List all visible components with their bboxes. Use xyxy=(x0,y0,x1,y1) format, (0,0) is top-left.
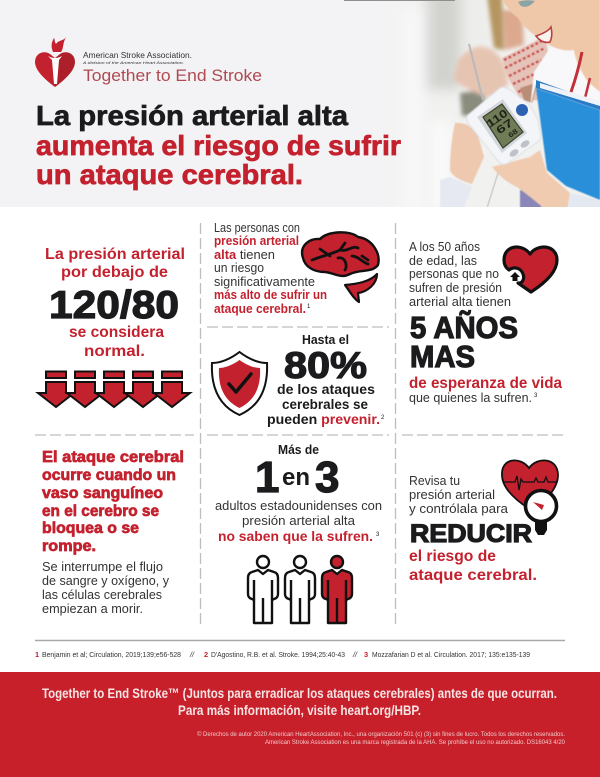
icon: heart and torch xyxy=(35,37,75,87)
footnotes: D'Agostino, R.B. et al. Stroke. 1994;25:40-43 xyxy=(211,650,345,659)
text: normal pressure: La presión arterial xyxy=(45,246,185,263)
title: un ataque cerebral. xyxy=(36,159,303,190)
text: 80 percent: 2 xyxy=(381,415,385,421)
text: risk: ataque cerebral. xyxy=(214,302,306,316)
text: 1 en 3: 3 xyxy=(376,532,380,538)
text: 80 percent: de los ataques xyxy=(277,381,375,397)
face and neck xyxy=(500,0,600,92)
copyright: © Derechos de autor 2020 American HeartAssociation, Inc., una organización 501 (c) (3) sin fines de lucro. Todos los derechos reservados. xyxy=(197,731,565,738)
text: explanation: las células cerebrales xyxy=(42,588,162,602)
text: risk: Las personas con xyxy=(214,221,300,235)
panel: what is a stroke xyxy=(42,449,184,616)
folder xyxy=(536,88,600,200)
footnotes: // xyxy=(352,650,358,659)
text: definition: El ataque cerebral xyxy=(42,449,184,466)
text: definition: rompe. xyxy=(42,538,96,555)
title xyxy=(36,100,401,190)
text: 1 en 3: adultos estadounidenses con xyxy=(215,499,382,513)
panel: 5 years more: que quienes la sufren. xyxy=(409,391,532,405)
copyright xyxy=(197,731,566,746)
icon: down arrows xyxy=(38,372,190,407)
text: explanation: empiezan a morir. xyxy=(42,602,143,616)
footnotes: // xyxy=(189,650,195,659)
panel: 120/80 normal xyxy=(38,246,190,407)
footnotes: 3 xyxy=(364,650,368,659)
hands and sleeve xyxy=(450,123,484,184)
logo text: American Stroke Association. xyxy=(83,50,192,60)
panel: reduce the risk xyxy=(409,460,558,584)
footer band xyxy=(0,672,600,777)
text: 1 en 3: 3 xyxy=(315,453,339,502)
text: intro: sufren de presión xyxy=(409,281,502,295)
text: intro xyxy=(409,240,511,309)
icon: three people xyxy=(248,556,352,623)
text: definition xyxy=(42,449,184,555)
text: intro: de edad, las xyxy=(409,254,477,268)
header background xyxy=(0,0,600,207)
panel: 80% preventable xyxy=(212,332,385,427)
panel: brain risk xyxy=(214,221,379,316)
text: normal pressure xyxy=(45,246,185,360)
number: 5 años mas: 5 AÑOS xyxy=(410,310,518,345)
header photo: woman with blood pressure monitor xyxy=(344,0,600,215)
text: risk: más alto de sufrir un xyxy=(214,288,327,302)
text: life expectancy: de esperanza de vida xyxy=(409,375,562,392)
logo: American Stroke Association: Together to End Stroke xyxy=(83,66,262,85)
text: intro: arterial alta tienen xyxy=(409,295,511,309)
text: 80 percent xyxy=(267,332,385,427)
text: definition: vaso sanguíneo xyxy=(42,485,163,502)
text: normal pressure: se considera xyxy=(69,324,164,341)
text: reducir: REDUCIR xyxy=(410,520,532,548)
panel: 5 years more: MAS xyxy=(410,339,475,374)
text: intro: personas que no xyxy=(409,267,499,281)
text: 1 en 3: 1 xyxy=(255,453,279,502)
header photo: woman with blood pressure monitor: 68 xyxy=(507,128,520,140)
panel: 5 years more xyxy=(409,240,562,405)
text: risk xyxy=(214,221,327,316)
footer call to action xyxy=(42,685,557,718)
text: check your pressure: Revisa tu xyxy=(409,474,460,488)
text: check your pressure: y contrólala para xyxy=(409,502,508,516)
title: La presión arterial alta xyxy=(36,100,348,131)
logo: American Stroke Association: A division of the American Heart Association. xyxy=(82,61,184,65)
panel: reduce the risk: ataque cerebral. xyxy=(409,567,537,584)
copyright: American Stroke Association es una marca registrada de la AHA. Se prohíbe el uso no autorizado. DS16043 4/20 xyxy=(265,740,566,746)
panel: 5 years more: 3 xyxy=(534,393,538,399)
text: 1 en 3: Más de xyxy=(278,442,319,457)
icon: heart with arrow xyxy=(504,247,557,292)
text: intro: A los 50 años xyxy=(409,240,480,254)
text: normal pressure: por debajo de xyxy=(61,264,168,281)
text: risk: 1 xyxy=(307,304,311,310)
text: definition: ocurre cuando un xyxy=(42,467,176,484)
icon: brain xyxy=(302,232,379,302)
icon: shield with check xyxy=(212,352,267,415)
logo: American Stroke Association xyxy=(35,37,262,87)
sweater with stripes xyxy=(502,36,548,103)
footnotes: 1 xyxy=(35,650,39,659)
text: 1 en 3: en xyxy=(282,464,310,491)
text: risk: alta tienen xyxy=(214,248,275,262)
header photo: woman with blood pressure monitor: 110 xyxy=(485,107,510,130)
text: risk: significativamente xyxy=(214,275,315,289)
text: explanation: de sangre y oxígeno, y xyxy=(42,574,170,588)
footnotes: Mozzafarian D et al. Circulation. 2017; 135:e135-139 xyxy=(372,650,530,659)
text: 1 en 3: presión arterial alta xyxy=(242,514,355,528)
footnotes xyxy=(35,650,530,659)
text: stroke risk: el riesgo de xyxy=(409,548,496,565)
text: normal pressure: normal. xyxy=(84,343,145,360)
text: check your pressure xyxy=(409,474,508,516)
title: aumenta el riesgo de sufrir xyxy=(36,130,401,161)
text: 1 en 3 xyxy=(215,442,382,544)
panel: 1 in 3 adults xyxy=(215,442,382,623)
header photo: woman with blood pressure monitor: 67 xyxy=(494,117,516,137)
number: 120/80: 120/80 xyxy=(49,284,179,327)
text: 80 percent: 80% xyxy=(284,345,367,386)
footnotes: Benjamin et al; Circulation, 2019;139;e56-528 xyxy=(42,650,181,659)
icon: heart with gauge xyxy=(502,460,558,535)
monitor xyxy=(467,87,541,164)
footnotes: 2 xyxy=(204,650,208,659)
text: 1 en 3: no saben que la sufren. xyxy=(218,529,373,544)
text: 80 percent: cerebrales se xyxy=(282,396,368,412)
text: check your pressure: presión arterial xyxy=(409,488,495,502)
text: risk: presión arterial xyxy=(214,234,299,248)
text: explanation xyxy=(42,560,170,616)
footer call to action: Para más información, visite heart.org/HBP. xyxy=(178,702,421,718)
text: risk: un riesgo xyxy=(214,261,264,275)
text: definition: bloquea o se xyxy=(42,520,139,537)
text: 80 percent: Hasta el xyxy=(302,332,349,347)
text: definition: en el cerebro se xyxy=(42,503,159,520)
text: 80 percent: pueden prevenir. xyxy=(267,411,380,427)
coat xyxy=(530,47,600,104)
text: explanation: Se interrumpe el flujo xyxy=(42,560,163,574)
